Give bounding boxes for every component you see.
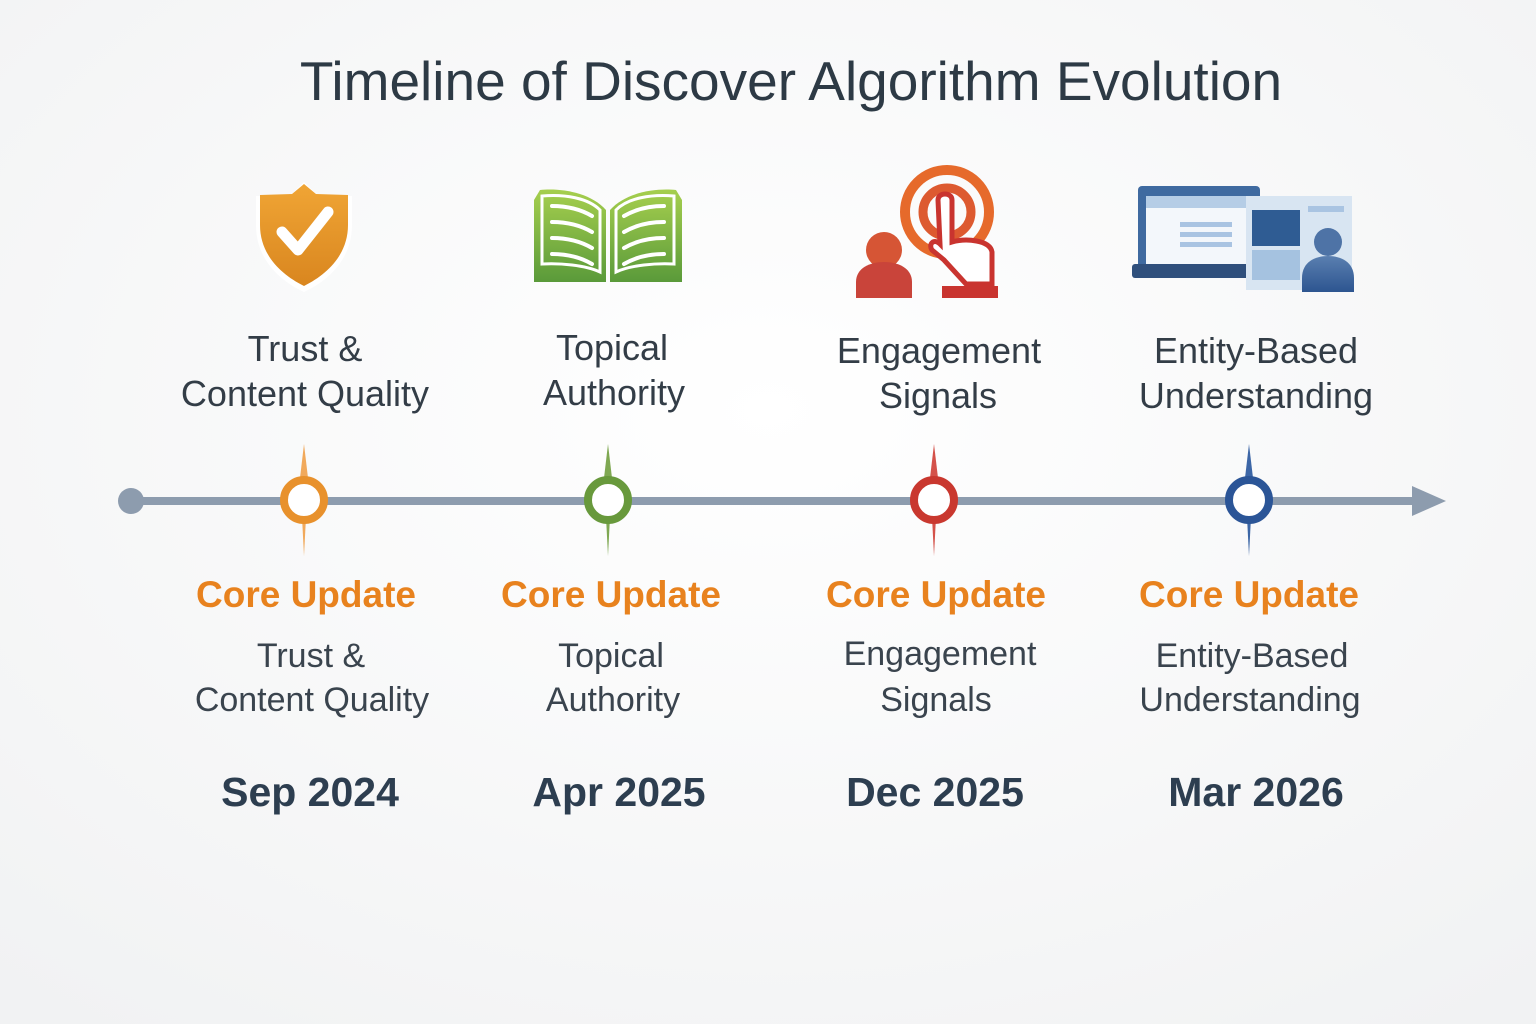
top labels: Content Quality bbox=[181, 373, 429, 414]
bottom descriptions: Content Quality bbox=[195, 681, 429, 719]
bottom descriptions: Trust & bbox=[257, 637, 365, 675]
core update headings: Core Update bbox=[501, 574, 721, 615]
icon: laptop with profile bbox=[1132, 186, 1354, 292]
timeline axis with arrow bbox=[118, 486, 1446, 516]
core update headings: Core Update bbox=[196, 574, 416, 615]
core update headings bbox=[196, 574, 1359, 615]
core update headings: Core Update bbox=[826, 574, 1046, 615]
icon: engagement bbox=[856, 170, 998, 298]
bottom descriptions: Topical bbox=[558, 637, 664, 675]
dates: Dec 2025 bbox=[846, 769, 1024, 815]
top labels: Topical bbox=[556, 327, 668, 368]
bottom descriptions: Engagement bbox=[844, 635, 1037, 673]
icon: shield bbox=[256, 182, 352, 292]
bottom descriptions bbox=[195, 635, 1361, 719]
bottom descriptions: Entity-Based bbox=[1156, 637, 1348, 675]
top labels: Engagement bbox=[837, 330, 1041, 371]
marker: Dec 2025 bbox=[914, 444, 954, 556]
dates: Sep 2024 bbox=[221, 769, 399, 815]
top labels: Trust & bbox=[248, 328, 362, 369]
core update headings: Core Update bbox=[1139, 574, 1359, 615]
top labels: Signals bbox=[879, 375, 997, 416]
bottom descriptions: Signals bbox=[880, 681, 992, 719]
dates: Apr 2025 bbox=[532, 769, 706, 815]
top labels: Entity-Based bbox=[1154, 330, 1358, 371]
top labels: Understanding bbox=[1139, 375, 1373, 416]
top labels: Authority bbox=[543, 372, 685, 413]
marker: Sep 2024 bbox=[284, 444, 324, 556]
bottom descriptions: Authority bbox=[546, 681, 680, 719]
dates bbox=[221, 769, 1344, 815]
title: Timeline of Discover Algorithm Evolution bbox=[300, 50, 1282, 112]
dates: Mar 2026 bbox=[1168, 769, 1344, 815]
marker: Apr 2025 bbox=[588, 444, 628, 556]
top labels bbox=[181, 327, 1373, 416]
marker: Mar 2026 bbox=[1229, 444, 1269, 556]
icon: book bbox=[534, 190, 682, 282]
bottom descriptions: Understanding bbox=[1139, 681, 1361, 719]
